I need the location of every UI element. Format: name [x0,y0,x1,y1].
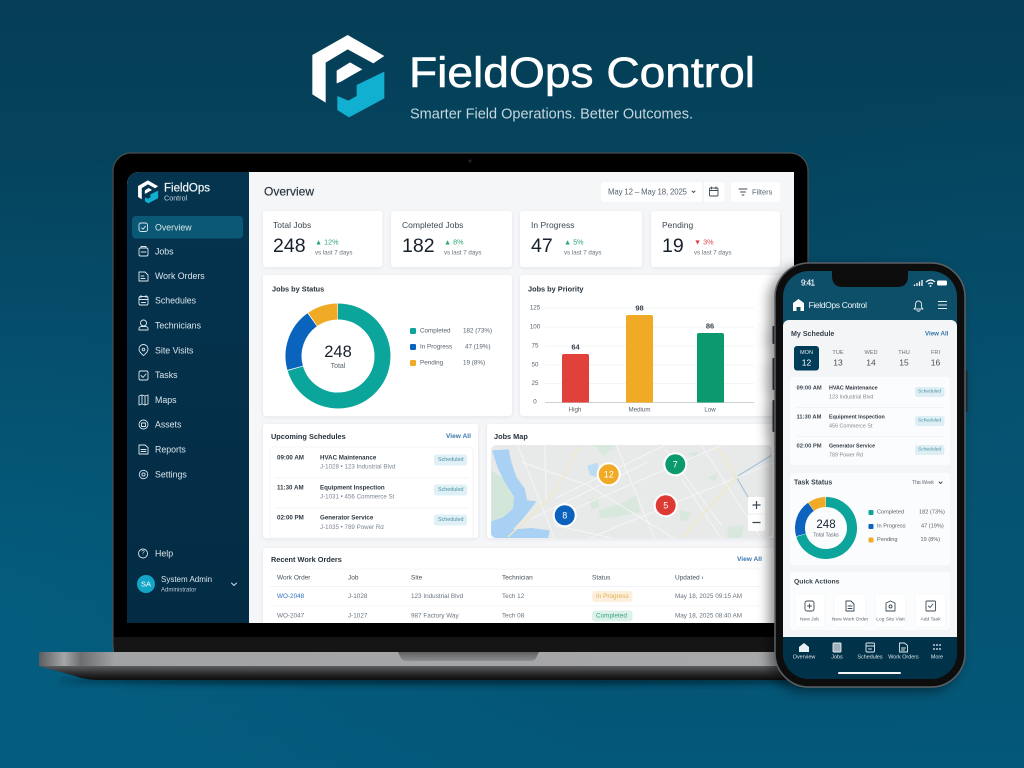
schedule card: Scheduled [918,388,941,394]
nav: overview active [132,216,243,238]
action: new work order: New Work Order [832,616,869,622]
KPI: completed jobs: vs last 7 days [444,250,482,256]
schedule row [277,514,467,529]
map marker: 7 [663,452,687,476]
phone legend: Pending [877,537,898,543]
schedule row: HVAC Maintenance [320,454,377,462]
panel: sidebar [127,172,249,623]
nav: settings: Settings [155,470,187,480]
bar chart: 64 [571,342,580,352]
KPI: total jobs: ▲ 12% [315,238,339,246]
tab: overview: Overview [793,654,815,660]
bar chart: High [569,406,582,414]
table row: WO-2048: May 18, 2025 09:15 AM [675,593,742,600]
nav: help [138,548,173,558]
panel: jobs by priority [520,275,782,416]
nav: overview active: Overview [155,222,192,232]
schedule row [277,484,467,498]
KPI: pending: ▼ 3% [694,238,714,246]
nav: maps: Maps [155,395,177,405]
KPI: pending: Pending [662,220,693,230]
nav: settings [139,470,187,480]
schedule card: Scheduled [918,446,941,452]
user profile [137,575,236,594]
schedule card: HVAC Maintenance [829,386,878,392]
phone legend: Completed [877,510,904,516]
schedule row: 09:00 AM [277,454,304,462]
phone status bar: 9:41 [801,278,816,288]
tab: work orders: Work Orders [888,654,919,660]
map marker: 5 [654,493,678,517]
bar chart: 0 [533,398,537,406]
schedule row: 02:00 PM [277,514,304,522]
sidebar brand [164,182,210,202]
phone header: FieldOps Control [808,300,867,310]
table header: Technician [502,574,533,582]
day: thu [898,350,910,368]
home indicator [838,672,901,674]
user profile: Administrator [161,588,196,594]
icon: FieldOps logo [312,35,384,117]
panel: recent work orders: View All [737,556,762,563]
panel: upcoming schedules: View All [446,433,471,440]
phone legend: 19 (8%) [920,537,940,543]
KPI: total jobs [263,211,382,267]
KPI: in progress: ▲ 5% [564,238,584,246]
nav: site visits: Site Visits [155,346,194,356]
schedule card: Equipment Inspection [829,414,885,420]
schedule row: Scheduled [438,517,463,523]
map marker: 8: 8 [562,510,567,520]
nav: jobs [139,246,174,256]
KPI: completed jobs: 182 [402,235,435,257]
laptop lid [113,153,808,663]
panel: jobs map [487,424,782,539]
bar chart: 98 [635,304,644,312]
phone: task status: This Week [912,480,934,486]
heading: overview: Overview [264,184,314,198]
schedule card: 02:00 PM [796,444,822,450]
legend: 19 (8%) [463,360,485,366]
phone: task status: Task Status [794,480,832,486]
action: log site visit: Log Site Visit [876,616,905,622]
day: mon selected [794,346,819,370]
KPI: pending [651,211,780,267]
schedule row: J-1031 • 456 Commerce St [320,494,395,500]
day: tue: TUE [832,350,844,356]
phone buttons [772,326,968,432]
panel: recent work orders: Recent Work Orders [271,555,342,564]
table row: WO-2048 [277,591,742,602]
panel: jobs by status: Total [331,363,346,370]
table header [277,574,704,582]
phone: task status [790,473,950,565]
date range picker: May 12 – May 18, 2025 [608,188,688,196]
KPI: pending: 19 [662,235,684,257]
donut chart [294,312,382,400]
laptop [39,153,882,685]
phone body [775,263,965,687]
panel: upcoming schedules: Upcoming Schedules [271,432,346,441]
table header: Work Order [277,574,311,582]
table row: WO-2048: 123 Industrial Blvd [411,593,464,600]
table row: WO-2047: Completed [596,612,627,620]
legend: Completed [420,328,451,334]
nav: schedules: Schedules [155,296,197,306]
bar chart: 100 [530,324,541,330]
schedule row: 11:30 AM [277,484,304,492]
phone bottom nav [783,637,957,679]
table row: WO-2047: May 18, 2025 08:40 AM [675,612,742,620]
bar chart: 50 [532,362,539,368]
tab: schedules: Schedules [857,654,883,660]
nav: maps [139,395,177,405]
phone legend: In Progress [877,524,906,530]
user profile: SA [141,580,151,588]
nav: tasks: Tasks [155,370,178,380]
map marker: 7: 7 [673,460,678,470]
panel: jobs by priority: Jobs by Priority [528,284,584,294]
table header: Site [411,574,423,582]
table row: WO-2047: Tech 08 [502,612,525,620]
nav: help: Help [155,548,173,558]
schedule card [790,377,950,465]
nav: help: ? [141,550,145,556]
map marker: 5: 5 [663,500,668,510]
panel: recent work orders [263,548,780,638]
tab: jobs [831,643,843,660]
table row: WO-2047 [277,610,742,622]
filters button [731,182,780,202]
nav: jobs: Jobs [155,246,174,256]
bar chart: 25 [532,380,539,387]
day: tue: 13 [833,358,843,368]
day: wed: 14 [866,358,876,368]
schedule row: Generator Service [320,514,374,522]
sidebar brand: FieldOps [164,182,210,194]
phone: quick actions [790,572,950,630]
table row: WO-2047: WO-2047 [277,612,305,620]
panel: jobs by status: 248 [324,343,352,361]
table row: WO-2048: J-1028 [348,593,368,600]
map zoom controls [748,497,765,531]
panel: jobs by status: Jobs by Status [272,284,324,294]
phone screen [783,271,957,679]
nav: tasks [139,370,178,380]
schedule row: Scheduled [438,457,463,463]
action: new work order [832,594,869,627]
KPI: in progress: vs last 7 days [564,250,602,256]
schedule card: 11:30 AM [796,414,822,420]
phone: quick actions: Quick Actions [794,578,840,586]
table header: Status [592,574,611,582]
panel: jobs map: Jobs Map [494,432,528,441]
nav: reports [139,444,186,454]
action: new job: New Job [800,616,819,622]
tagline: Smarter Field Operations. Better Outcomes. [410,106,693,122]
day: fri: FRI [931,350,940,356]
tab: more: More [931,654,943,660]
title: FieldOps Control [409,49,755,97]
KPI: total jobs: vs last 7 days [315,250,352,256]
phone header [793,299,947,311]
table row: WO-2047: 987 Factory Way [411,612,460,620]
map marker: 8 [553,503,577,527]
bar chart: Low [704,406,716,414]
date range picker [601,182,724,202]
KPI: total jobs: 248 [273,235,306,257]
tab: work orders [888,643,919,660]
KPI: in progress: 47 [531,235,553,257]
bar chart: Medium [628,406,651,414]
sidebar brand: Control [164,194,188,202]
phone [772,263,968,687]
phone legend [868,510,945,543]
bar chart: 125 [530,304,541,312]
phone content [783,320,957,642]
schedule card: Generator Service [829,444,875,450]
table row: WO-2048: WO-2048 [277,593,305,600]
legend: In Progress [420,344,452,350]
bar chart: 86 [706,322,714,330]
day: thu: THU [898,350,910,356]
schedule row: J-1035 • 789 Power Rd [320,524,384,531]
nav: work orders: Work Orders [155,271,205,281]
table row: WO-2047: J-1027 [348,612,368,620]
action: log site visit [875,594,906,627]
bar chart [530,304,754,414]
phone: task status: 248 [816,519,836,531]
day: wed: WED [864,350,878,356]
phone legend: 182 (73%) [919,510,945,516]
day: tue [832,350,844,368]
schedule row [277,454,467,468]
schedule card: Scheduled [918,418,941,424]
phone notch [832,271,908,287]
table header: Updated › [675,574,704,582]
action: add task [915,594,946,627]
user profile: System Admin [161,575,212,584]
KPI: pending: vs last 7 days [694,250,732,256]
schedule row: Scheduled [438,487,463,493]
laptop shadow [60,677,860,685]
phone legend: 47 (19%) [921,524,944,530]
map marker: 12: 12 [604,470,614,480]
legend [410,328,492,366]
laptop base [39,652,882,680]
schedule card: 09:00 AM [796,386,822,392]
phone status bar [801,278,947,288]
day: thu: 15 [899,358,909,368]
map marker: 12 [597,462,621,486]
filters button: Filters [752,188,773,196]
KPI: in progress [520,211,642,267]
legend: 47 (19%) [465,344,491,350]
day: fri [931,350,940,368]
tab: overview [793,643,815,660]
nav: reports: Reports [155,444,186,454]
table header: Job [348,574,359,582]
tab: schedules [857,643,883,660]
panel: upcoming schedules [263,424,478,538]
legend: Pending [420,360,444,366]
table row: WO-2048: In Progress [596,593,629,600]
KPI: completed jobs: ▲ 8% [444,238,464,246]
nav: site visits [139,344,194,356]
schedule card: 789 Power Rd [829,452,863,458]
KPI: total jobs: Total Jobs [273,220,311,230]
phone: task status: Total Tasks [813,532,839,538]
legend: 182 (73%) [463,328,492,334]
bar chart: 75 [532,342,539,350]
nav: technicians: Technicians [155,320,202,330]
phone: my schedule: View All [925,330,949,338]
action: add task: Add Task [920,616,941,622]
tab: jobs: Jobs [831,654,843,660]
tab: more [931,645,943,660]
nav: assets [139,420,182,430]
KPI: completed jobs [391,211,512,267]
schedule row: J-1028 • 123 Industrial Blvd [320,464,396,470]
phone: my schedule: My Schedule [791,330,834,338]
action: new job [795,594,825,627]
schedule card: 123 Industrial Blvd [829,394,873,400]
panel: jobs by status [263,275,512,416]
schedule row: Equipment Inspection [320,484,385,492]
phone: my schedule [790,330,950,465]
day: mon selected: 12 [802,358,811,368]
schedule card: 456 Commerce St [829,424,873,430]
table row: WO-2048: Tech 12 [502,593,525,600]
nav: assets: Assets [155,420,182,430]
phone donut chart [800,502,852,554]
map [491,445,775,539]
nav: technicians [139,320,202,330]
day: fri: 16 [931,358,940,368]
KPI: in progress: In Progress [531,220,574,230]
screen [127,172,794,638]
icon: sidebar logo [138,180,158,203]
KPI: completed jobs: Completed Jobs [402,220,463,230]
day: wed [864,350,878,368]
day: mon selected: MON [800,350,813,356]
